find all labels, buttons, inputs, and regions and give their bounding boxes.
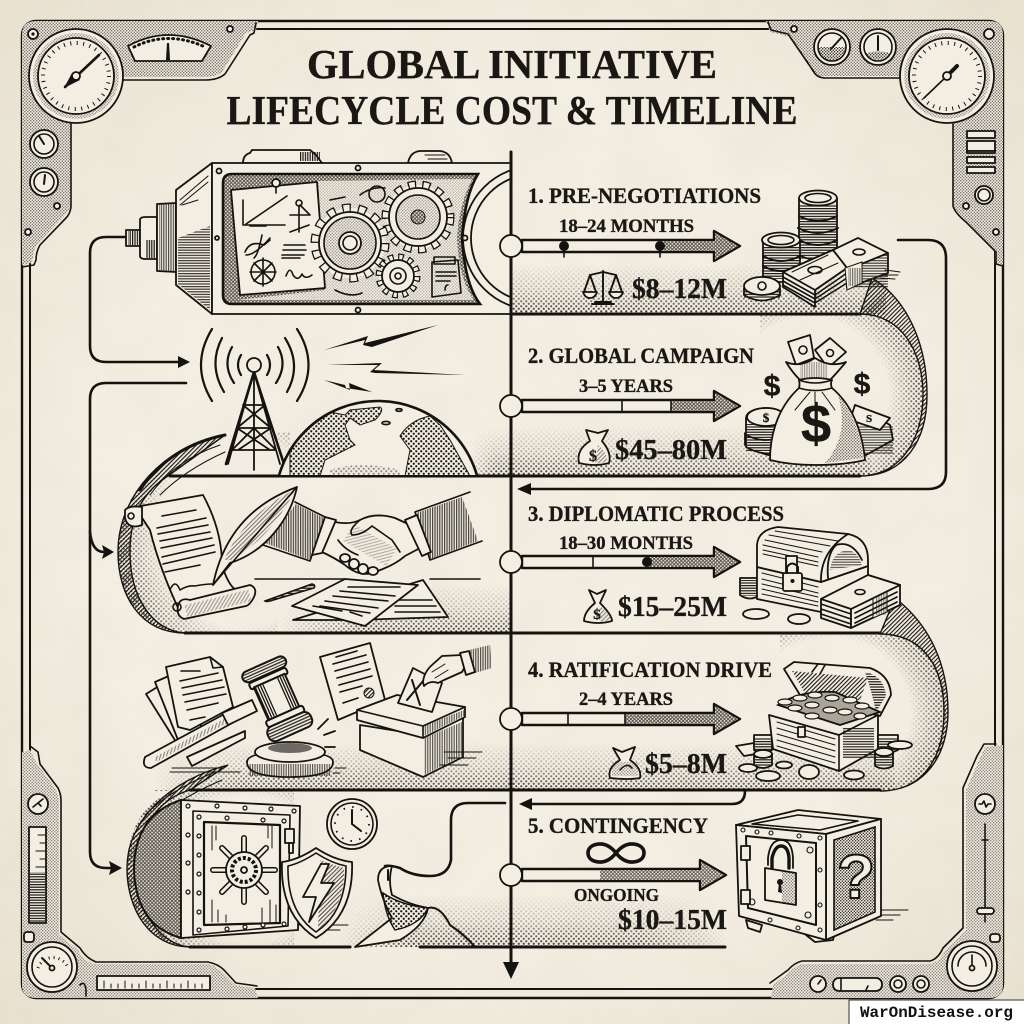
step 2: global campaign: 2. GLOBAL CAMPAIGN xyxy=(528,343,754,368)
step 3: diplomatic process: 3. DIPLOMATIC PROCESS xyxy=(528,501,784,526)
gears xyxy=(315,185,450,295)
corner plate: top right xyxy=(766,21,1003,266)
icon: infinity xyxy=(588,844,644,862)
watermark xyxy=(849,1000,1024,1024)
illustration: broadcast tower xyxy=(201,325,465,470)
step 4: ratification drive: 4. RATIFICATION DRIVE xyxy=(528,657,772,682)
icon: large money bag: S xyxy=(866,413,872,425)
icon: locked mystery safe: ? xyxy=(837,843,875,912)
step 1: pre-negotiations xyxy=(500,183,900,307)
timeline axis xyxy=(503,152,519,979)
icon: large money bag: $ xyxy=(801,394,831,454)
step 5: contingency: 5. CONTINGENCY xyxy=(528,813,708,838)
step 5: contingency xyxy=(500,810,908,942)
illustration: lightning shield xyxy=(282,848,352,938)
icon: open treasure chest xyxy=(736,662,912,781)
corner plate: bottom left xyxy=(22,746,258,998)
step 2: global campaign xyxy=(500,335,893,466)
duration arrow xyxy=(500,231,740,261)
illustration: torn ribbon end xyxy=(355,866,475,947)
icon: small money bag: $ xyxy=(593,607,601,623)
watermark: WarOnDisease.org xyxy=(860,1004,1013,1022)
step 3: diplomatic process: 18–30 MONTHS xyxy=(559,533,693,554)
corner plate: top left xyxy=(22,21,258,267)
icon: large money bag: $ xyxy=(763,410,770,425)
icon: small money bag xyxy=(584,590,612,623)
icon: coin stacks and cash xyxy=(744,190,900,307)
icon: small money bag xyxy=(578,430,610,465)
duration arrow xyxy=(500,860,726,890)
ribbon curve: left upper xyxy=(118,435,225,633)
step 1: pre-negotiations: 18–24 MONTHS xyxy=(559,216,694,237)
illustration: negotiation machine xyxy=(125,149,510,315)
illustration: handshake xyxy=(263,492,482,575)
corner plate: bottom right xyxy=(770,744,1003,998)
title: GLOBAL INITIATIVE xyxy=(307,41,717,87)
connector lines xyxy=(90,237,946,876)
title: LIFECYCLE COST & TIMELINE xyxy=(226,87,798,133)
duration arrow xyxy=(500,391,740,421)
icon: large money bag: $ xyxy=(764,370,781,403)
step 4: ratification drive xyxy=(500,657,912,781)
ribbon curve: right upper xyxy=(860,278,927,476)
small plan sheet xyxy=(432,257,461,297)
icon: closed treasure chest with cash xyxy=(740,527,900,628)
step 3: diplomatic process xyxy=(500,501,900,628)
step 3: diplomatic process: $15–25M xyxy=(618,591,727,623)
icon: scales xyxy=(583,271,623,304)
icon: locked mystery safe xyxy=(736,810,908,942)
serpentine ribbon xyxy=(118,264,948,947)
title xyxy=(226,41,798,133)
pinned sketch sheet xyxy=(231,179,325,295)
step 5: contingency: $10–15M xyxy=(618,904,727,936)
step 4: ratification drive: $5–8M xyxy=(645,748,727,780)
step 2: global campaign: $45–80M xyxy=(615,434,727,466)
step 1: pre-negotiations: 1. PRE-NEGOTIATIONS xyxy=(528,183,761,208)
icon: large money bag xyxy=(745,335,893,465)
illustration: ballot box xyxy=(320,643,492,777)
illustration: treaty papers and pen xyxy=(255,579,480,626)
illustration: stacked documents xyxy=(146,657,245,766)
illustration: scroll and quill xyxy=(125,487,297,619)
step 4: ratification drive: 2–4 YEARS xyxy=(579,689,673,710)
illustration: gavel xyxy=(144,655,346,777)
step 5: contingency: ONGOING xyxy=(574,885,659,905)
ribbon curve: right lower xyxy=(880,598,948,791)
illustration: clock xyxy=(327,799,377,849)
icon: small money bag: $ xyxy=(589,448,597,465)
illustration: globe xyxy=(278,400,478,475)
ribbon curve: left lower xyxy=(127,765,228,947)
quill feather xyxy=(213,487,297,585)
illustration: vault with wheel xyxy=(134,800,348,938)
step 2: global campaign: 3–5 YEARS xyxy=(579,376,673,397)
step 1: pre-negotiations: $8–12M xyxy=(632,273,727,305)
icon: large money bag: $ xyxy=(854,368,871,401)
duration arrow xyxy=(500,704,740,734)
duration arrow xyxy=(500,547,740,577)
icon: tied money sack xyxy=(609,747,640,779)
